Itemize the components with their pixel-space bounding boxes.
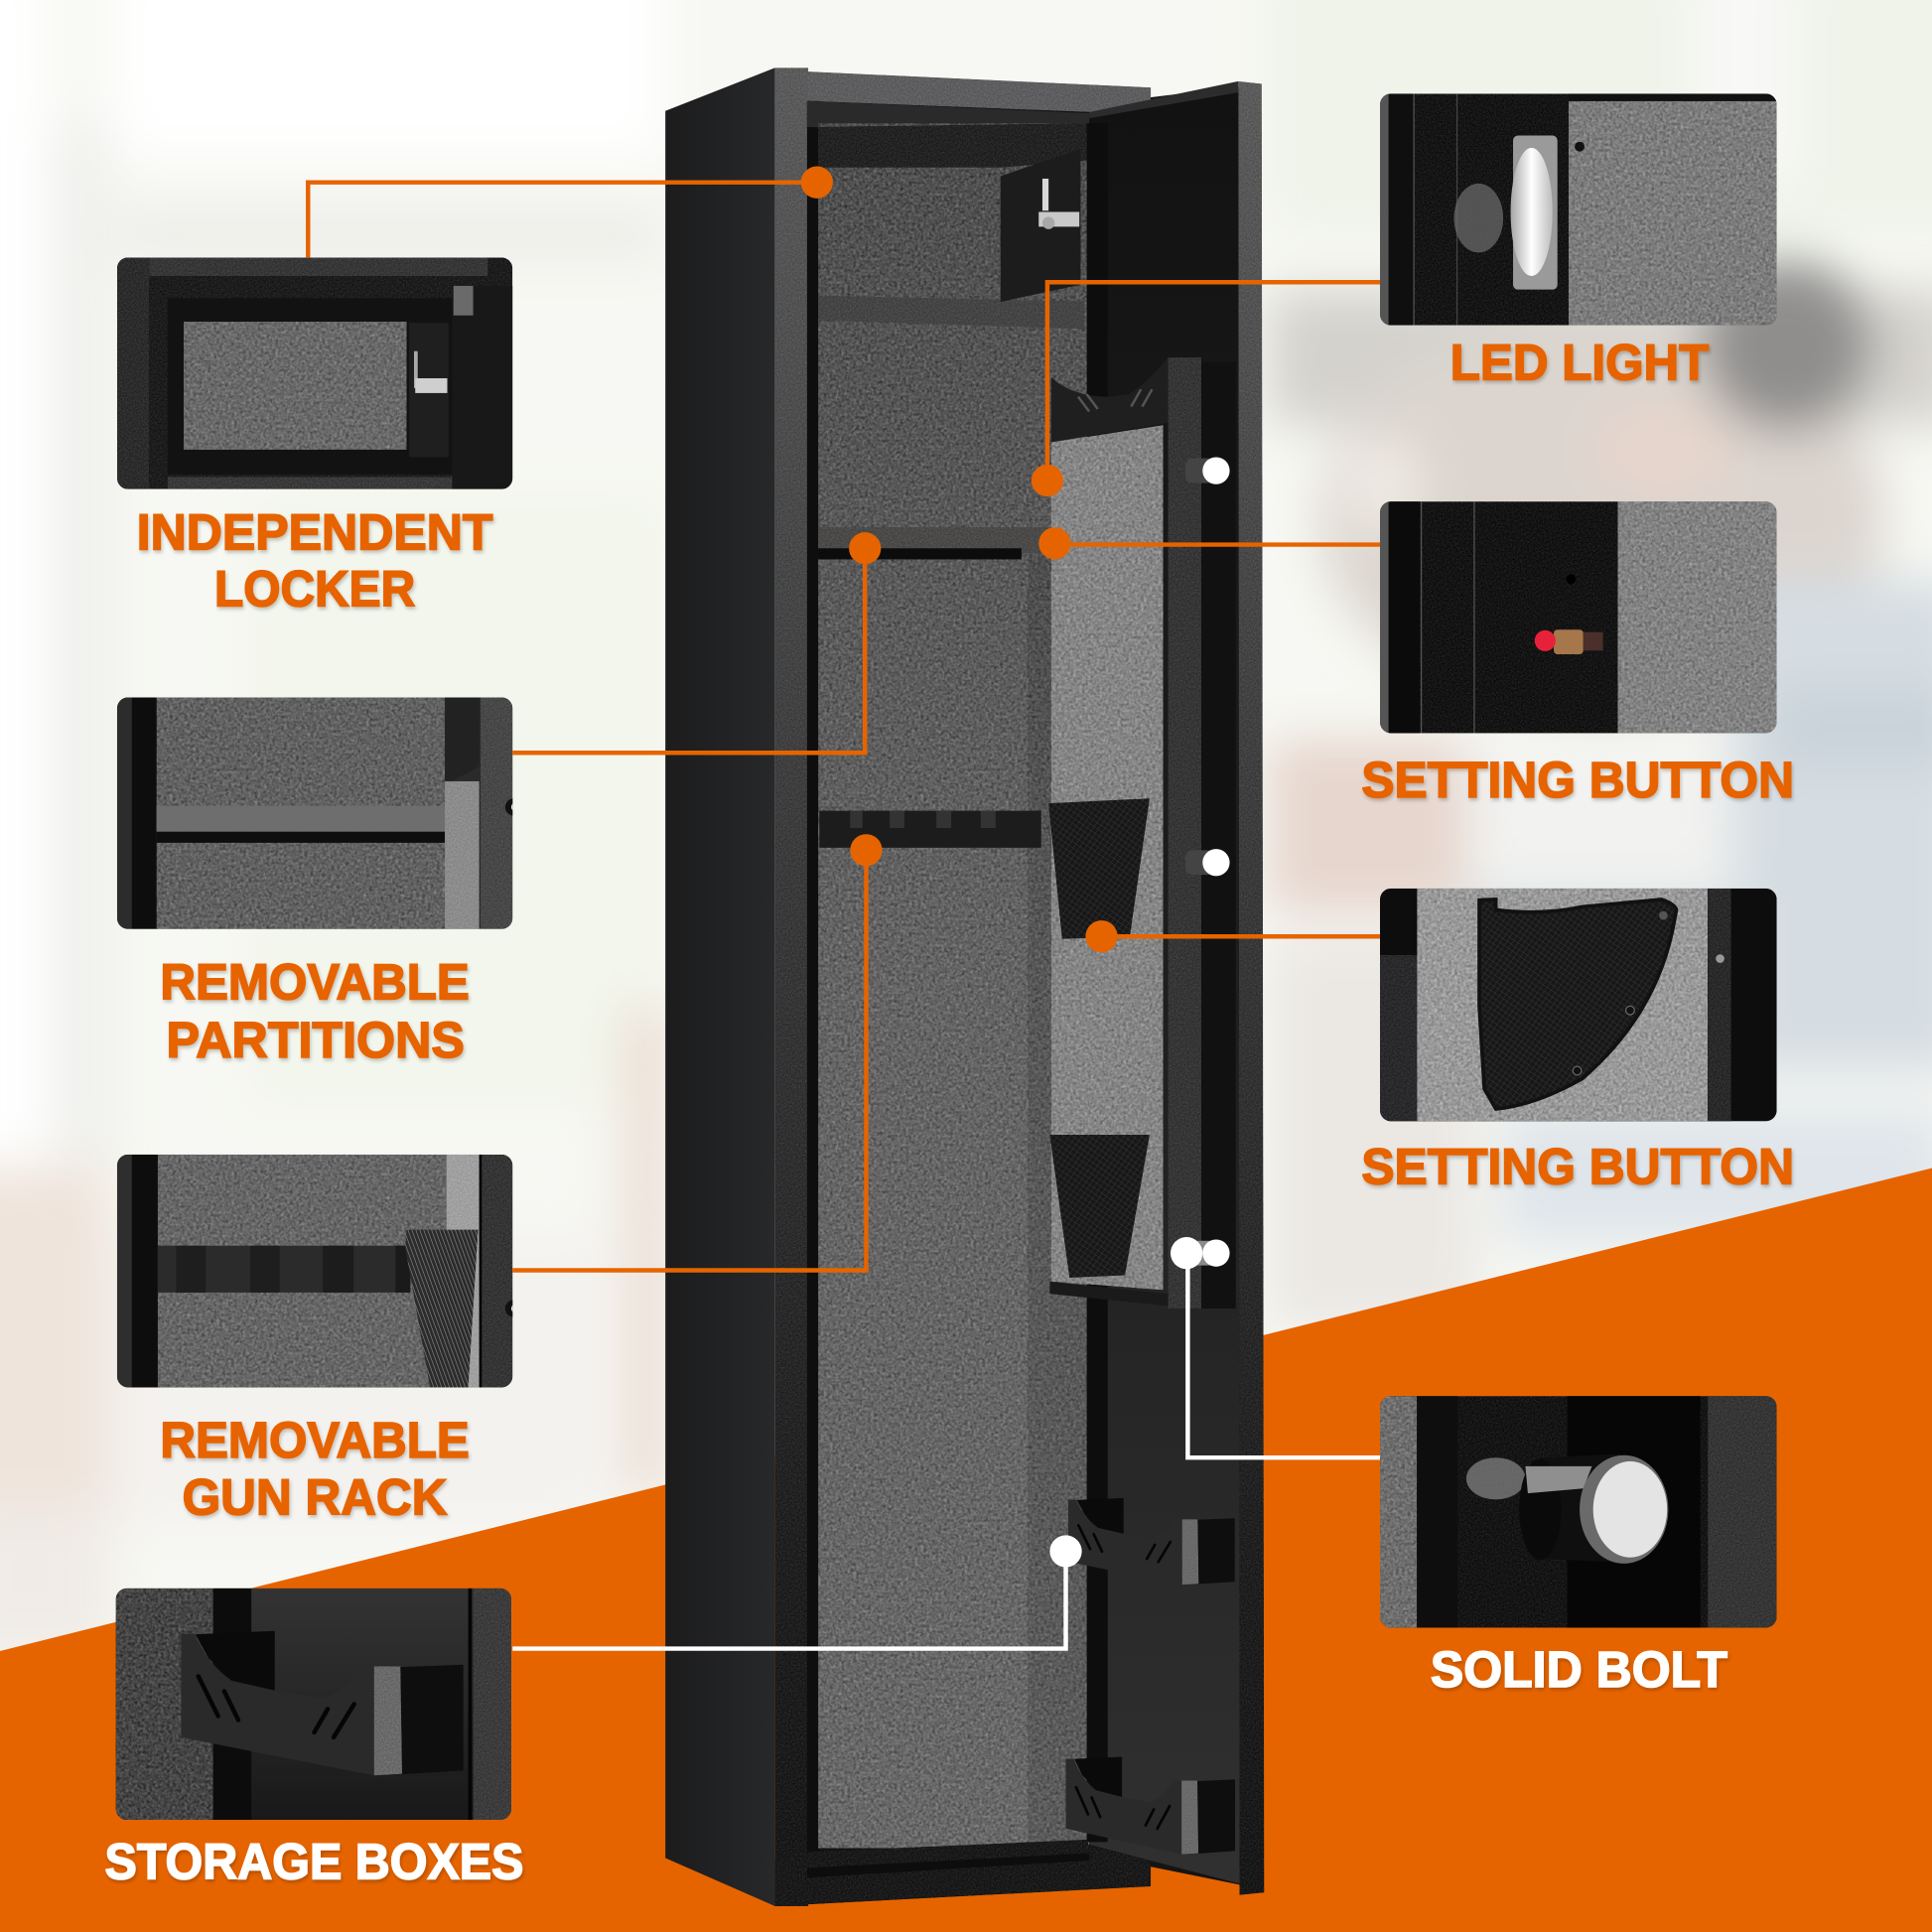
thumbnail: LED light	[1380, 93, 1777, 326]
door	[1087, 81, 1264, 1895]
felt back wall	[818, 123, 1089, 1849]
thumbnail: mesh pocket	[1380, 889, 1777, 1121]
label: solid bolt: SOLID BOLT	[1431, 1641, 1727, 1698]
independent locker	[818, 123, 1109, 329]
label: removable gun rack: REMOVABLE	[160, 1412, 470, 1468]
safe cabinet	[665, 68, 1264, 1906]
locking bolts	[1185, 457, 1230, 1267]
thumbnail: removable partitions	[117, 697, 522, 929]
label: setting button second: SETTING BUTTON	[1361, 1139, 1794, 1195]
label: removable partitions: REMOVABLE	[160, 954, 470, 1011]
callout dots	[801, 167, 1202, 1568]
thumbnail: solid bolt	[1380, 1396, 1777, 1627]
label: storage boxes: STORAGE BOXES	[104, 1834, 523, 1890]
removable partition	[818, 527, 1047, 559]
storage trays	[1066, 1498, 1235, 1855]
label: independent locker: LOCKER	[214, 561, 415, 618]
side panel	[665, 68, 775, 1906]
thumbnail: independent locker	[117, 257, 512, 489]
label: removable partitions	[160, 954, 470, 1068]
label: removable gun rack	[160, 1412, 470, 1525]
label: independent locker: INDEPENDENT	[137, 504, 492, 561]
bottom frame	[775, 1840, 1151, 1906]
label: LED light: LED LIGHT	[1450, 334, 1709, 390]
label: setting button: SETTING BUTTON	[1361, 752, 1794, 808]
connector lines	[308, 183, 1380, 1649]
thumbnail: storage boxes	[116, 1588, 511, 1820]
label: removable partitions: PARTITIONS	[167, 1012, 465, 1068]
label: removable gun rack: GUN RACK	[183, 1468, 448, 1525]
thumbnail: removable gun rack	[117, 1155, 522, 1387]
backing silhouette	[807, 86, 1242, 1885]
orange diagonal base	[0, 1169, 1932, 1932]
front frame	[775, 68, 1151, 1906]
thumbnail: setting button	[1380, 501, 1777, 733]
door column	[1169, 357, 1236, 1309]
label: independent locker	[137, 504, 492, 618]
removable gun rack	[819, 811, 1041, 848]
door felt panel	[1049, 357, 1169, 1307]
mesh pockets	[1048, 798, 1150, 1278]
